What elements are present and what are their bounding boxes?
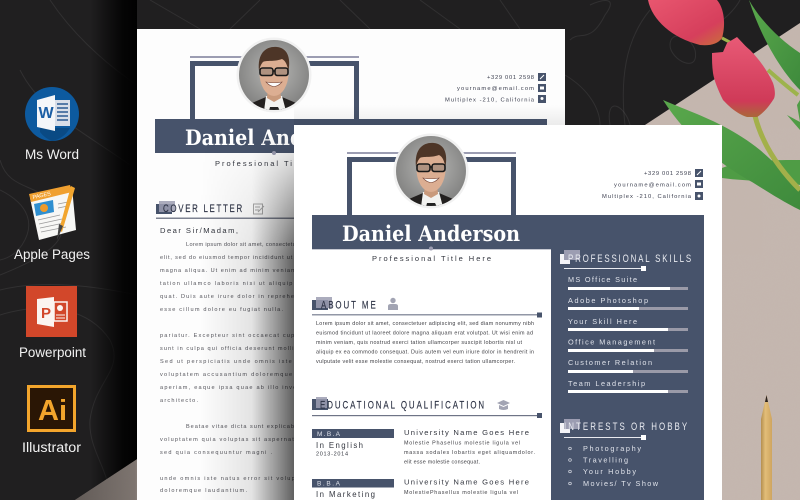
cover letter text: [160, 226, 316, 494]
cover letter text: doloremque laudantium.: [160, 488, 247, 494]
skill: Team Leadership: [568, 379, 688, 393]
skill: MS Office Suite: MS Office Suite: [568, 275, 637, 284]
interests list: Photography: [583, 444, 641, 453]
label: Illustrator: Illustrator: [22, 440, 82, 455]
education entry: B.B.A: MolestiePhasellus molestie ligula vel: [404, 490, 518, 496]
education entry: B.B.A: B.B.A: [317, 480, 341, 488]
professional skills heading: [560, 250, 691, 271]
cover letter text: elit, sed do eiusmod tempor incididunt ut labore: [160, 255, 315, 261]
cover letter text: Dear Sir/Madam,: [160, 226, 238, 235]
interests list: Movies/ Tv Show: [583, 479, 659, 488]
tulip: lower: [712, 37, 775, 117]
portrait: [394, 134, 468, 208]
icon: Apple Pages: PAGES: [32, 191, 52, 201]
skill: Office Management: [568, 338, 688, 352]
education entry: B.B.A: University Name Goes Here: [404, 478, 529, 486]
skill: Adobe Photoshop: Adobe Photoshop: [568, 296, 648, 305]
tulip: upper: [648, 0, 737, 46]
portrait: [236, 38, 312, 112]
cover letter text: aperiam, eaque ipsa quae ab illo inventore: [160, 385, 315, 391]
skill: Team Leadership: Team Leadership: [568, 379, 645, 388]
cover letter text: sunt in culpa qui officia deserunt mollit anim: [160, 346, 315, 352]
cover letter text: pariatur. Excepteur sint occaecat cupidatat: [160, 333, 315, 339]
about me heading: [312, 297, 542, 318]
cover letter text: architecto.: [160, 398, 198, 404]
skill: Office Management: Office Management: [568, 338, 655, 346]
cover letter text: tation ullamco laboris nisi ut aliquip ex ea: [160, 281, 316, 287]
contact details: +329 001 2598: [644, 171, 691, 177]
interests list: [569, 444, 659, 488]
icon: Powerpoint: P: [41, 305, 51, 322]
icon: Ms Word: [25, 87, 79, 141]
header frame: [347, 152, 516, 216]
professional skills heading: PROFESSIONAL SKILLS: [568, 253, 691, 265]
cover letter heading: [156, 201, 326, 219]
contact details: [445, 73, 546, 104]
skill: Customer Relation: [568, 358, 688, 373]
cover letter text: Sed ut perspiciatis unde omnis iste natus: [160, 359, 315, 365]
education entry: M.B.A: massa sodales lobartis eget aliquamdolor.: [404, 450, 535, 456]
education entry: M.B.A: University Name Goes Here: [404, 428, 529, 437]
tulips and leaves: [648, 0, 800, 210]
about me heading: ABOUT ME: [321, 299, 376, 312]
education entry: M.B.A: M.B.A: [317, 431, 341, 438]
leaf: upper right: [749, 0, 800, 90]
interests list: Travelling: [583, 456, 628, 464]
skill: MS Office Suite: [568, 275, 688, 290]
contact details: Multiplex -210, California: [602, 194, 692, 200]
icon: Ms Word: W: [38, 105, 54, 122]
icon: Apple Pages: [29, 185, 76, 240]
education entry: B.B.A: In Marketing: [316, 490, 375, 499]
contact details: yourname@email.com: [457, 86, 534, 92]
cover letter text: sed quia consequuntur magni .: [160, 450, 272, 456]
cover letter text: voluptatem accusantium doloremque lauda: [160, 372, 316, 378]
cover letter heading: COVER LETTER: [163, 203, 242, 215]
cover letter text: magna aliqua. Ut enim ad minim veniam, quis: [160, 268, 315, 274]
icon: Powerpoint: [26, 286, 77, 337]
cover letter text: quat. Duis aute irure dolor in reprehenderit: [160, 294, 315, 300]
back page: cover letter: [137, 29, 565, 500]
leaf: far right: [787, 100, 800, 130]
cover letter text: Lorem ipsum dolor sit amet, consectetur: [186, 242, 298, 248]
name banner: Daniel Anderson: [342, 221, 520, 246]
thin stem: [768, 70, 798, 95]
pencil: [761, 395, 772, 500]
cover letter text: esse cillum dolore eu fugiat nulla.: [160, 307, 283, 313]
professional title: Professional Title Here: [372, 254, 491, 263]
leaf: back right: [722, 160, 800, 185]
cover letter text: voluptatem quia voluptas sit aspernatur aut: [160, 437, 315, 443]
front page: resume: [294, 125, 722, 500]
education entry: M.B.A: Molestie Phasellus molestie ligula vel: [404, 440, 520, 446]
sidebar: [551, 215, 704, 500]
interests list: Your Hobby: [583, 467, 636, 476]
interests heading: INTERESTS OR HOBBY: [564, 421, 688, 433]
name banner: Daniel Anderson: [185, 125, 363, 150]
education entry: M.B.A: [312, 428, 535, 466]
cover letter text: Beatae vitae dicta sunt explicabo: [186, 424, 298, 430]
header frame: [190, 56, 359, 120]
interests heading: [560, 419, 688, 440]
icon: Illustrator: [28, 386, 74, 430]
label: Apple Pages: Apple Pages: [14, 247, 90, 262]
about me text: aliquip ex ea commodo consequat. Duis autem vel eum iriure dolor in hendrerit in: [316, 350, 534, 356]
cover letter text: unde omnis iste natus error sit voluptatem: [160, 476, 315, 482]
skill: Adobe Photoshop: [568, 296, 688, 310]
education entry: M.B.A: In English: [316, 441, 363, 450]
contact details: yourname@email.com: [614, 182, 691, 188]
about me text: euismod tincidunt ut laoreet dolore magna aliquam erat volutpat. Ut wisi enim ad: [316, 330, 533, 336]
stem: [755, 116, 800, 190]
label: Ms Word: Ms Word: [25, 147, 79, 162]
contact details: [602, 169, 703, 200]
about me text: [316, 321, 534, 365]
name banner: [155, 119, 547, 155]
about me text: vulputate velit esse molestie consequat, nostrud exerci tation ullamcorper.: [316, 359, 515, 365]
education entry: M.B.A: elit esse molestie consequat.: [404, 460, 480, 466]
name banner: [312, 215, 704, 249]
professional title: Professional Title Here: [215, 159, 334, 168]
educational qualification heading: EDUCATIONAL QUALIFICATION: [320, 399, 484, 412]
education entry: B.B.A: [312, 478, 529, 499]
about me text: minim veniam, quis nostrud exerci tation ullamcorper suscipit lobortis nisl ut: [316, 340, 522, 346]
icon: Illustrator: Ai: [38, 395, 67, 427]
label: Powerpoint: Powerpoint: [19, 345, 86, 360]
contact details: +329 001 2598: [487, 75, 534, 81]
skill: Your Skill Here: Your Skill Here: [568, 317, 637, 326]
leaf: lower: [663, 100, 800, 210]
about me text: Lorem ipsum dolor sit amet, consectetuer adipiscing elit, sed diam nonummy nibh: [316, 321, 534, 327]
skill: Customer Relation: Customer Relation: [568, 358, 652, 367]
contact details: Multiplex -210, California: [445, 98, 535, 104]
skill: Your Skill Here: [568, 317, 688, 331]
educational qualification heading: [312, 397, 542, 418]
education entry: M.B.A: 2013-2014: [316, 452, 348, 458]
